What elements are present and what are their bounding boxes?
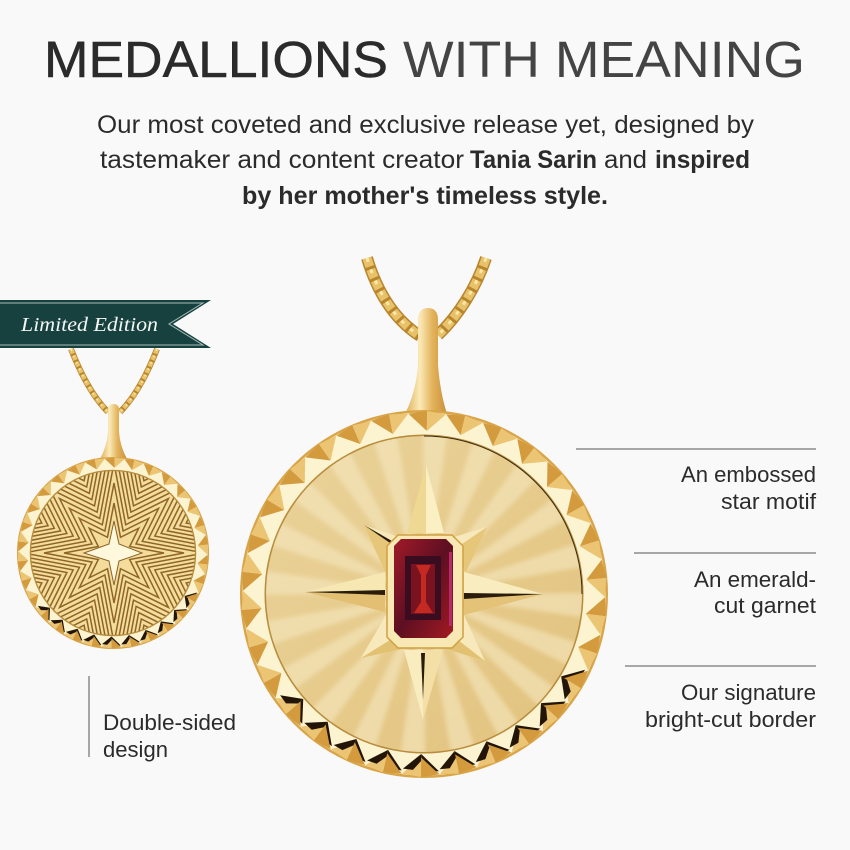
small necklace chain [71,349,157,412]
title [44,31,805,88]
large bright-cut border [240,410,608,778]
sunburst disc [264,434,584,754]
limited edition ribbon [0,300,211,348]
callout: embossed star motif [576,449,817,514]
callout: bright-cut border: Our signature [681,680,816,705]
large bail [405,308,447,414]
compass star [305,465,543,720]
gem bezel [387,535,463,648]
intro paragraph: Our most coveted and exclusive release yet, designed by [97,111,755,139]
callout: bright-cut border: bright-cut border [645,707,816,732]
intro paragraph: Tania Sarin [470,146,597,174]
callout: emerald-cut garnet [634,553,816,618]
small bail [100,404,127,459]
title: WITH MEANING [403,31,805,88]
emerald-cut garnet [394,539,453,638]
callout: embossed star motif: An embossed [681,462,816,487]
intro paragraph: and [604,146,647,174]
callout: bright-cut border [625,666,816,732]
callout: embossed star motif: star motif [721,489,817,514]
small medallion: reverse side, double-sided design [16,404,210,649]
disc edge shadow [424,436,582,594]
title: MEDALLIONS [44,31,388,88]
intro paragraph: inspired [655,146,750,174]
callout: double-sided design: Double-sided [103,710,236,735]
intro paragraph: by her mother's timeless style. [242,182,608,210]
engraved star disc [31,471,195,635]
large medallion: front side [240,308,608,778]
callout: emerald-cut garnet: cut garnet [714,593,816,618]
limited edition ribbon: Limited Edition [20,314,158,336]
intro paragraph: tastemaker and content creator [100,146,464,174]
callout: double-sided design [89,676,236,762]
large necklace chain [367,258,486,336]
callout: emerald-cut garnet: An emerald- [694,567,816,592]
callout: double-sided design: design [103,737,168,762]
small border ring [17,457,209,649]
intro paragraph [97,111,755,210]
